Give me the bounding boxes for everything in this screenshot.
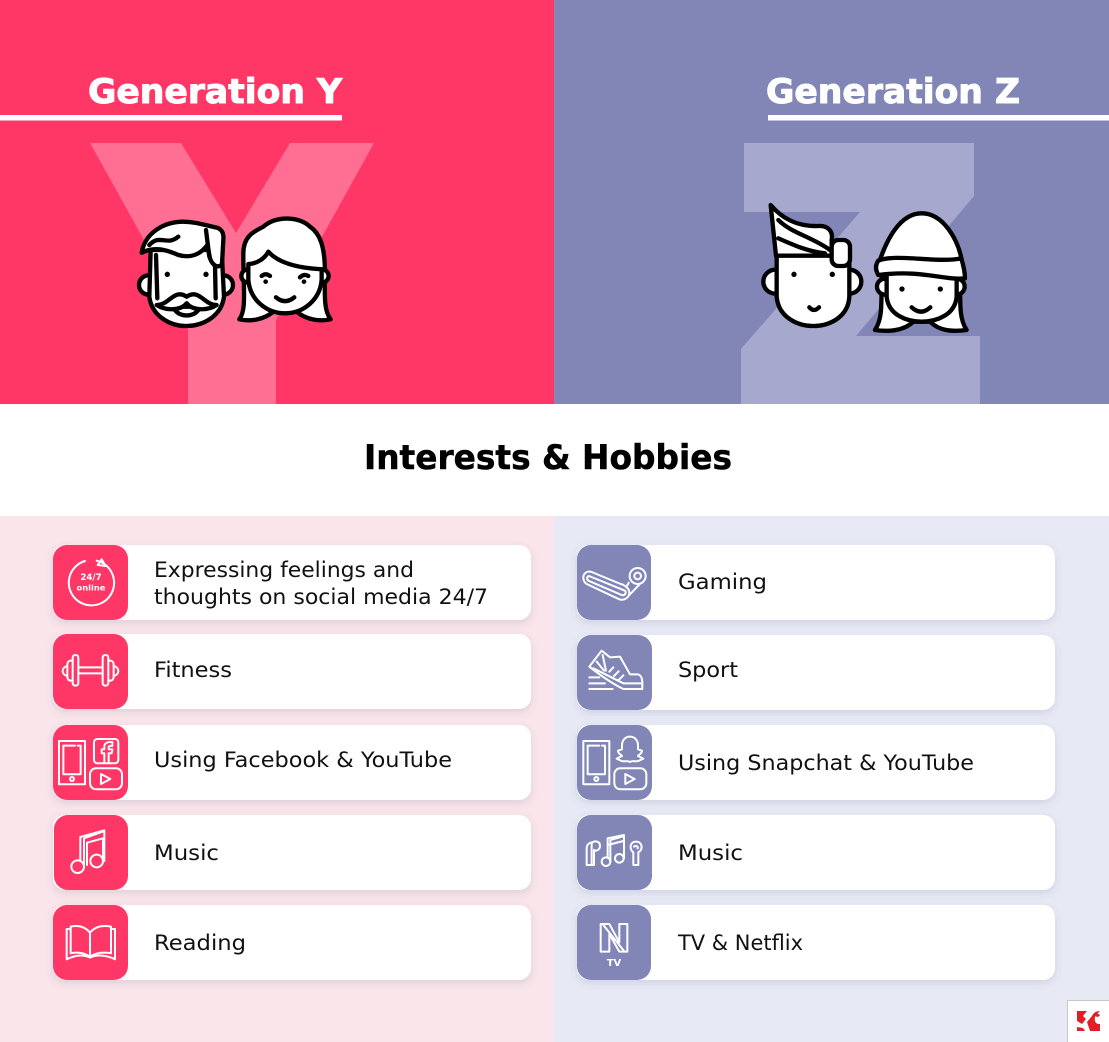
card: social media 24/7: thoughts on social media 24/7 <box>154 585 488 610</box>
panel: Generation Y header <box>0 0 554 404</box>
icon: Generation Z woman with beanie <box>875 213 967 331</box>
card: music <box>53 815 531 890</box>
card: Snapchat and YouTube: Using Snapchat & YouTube <box>678 751 974 776</box>
card: Snapchat and YouTube <box>577 725 1055 800</box>
card: reading <box>53 905 531 980</box>
card: gaming <box>577 545 1055 620</box>
icon: 24/7 online <box>69 559 114 605</box>
icon: 24/7 online: 24/7 <box>80 573 102 583</box>
icon: open book <box>67 926 115 959</box>
icon: Netflix TV <box>601 924 627 969</box>
card: fitness <box>53 634 531 709</box>
icon: phone, Facebook and YouTube <box>59 739 122 789</box>
logo badge <box>1068 1000 1109 1042</box>
card: social media 24/7 <box>53 545 531 620</box>
card: Facebook and YouTube <box>53 725 531 800</box>
card: gaming: Gaming <box>678 570 767 595</box>
heading: Generation Z: Generation Z <box>766 72 1020 112</box>
heading: Generation Y <box>0 72 342 120</box>
card: TV and Netflix <box>577 905 1055 980</box>
icon: dumbbell <box>63 655 118 686</box>
icon: Generation Y man with moustache <box>139 222 233 326</box>
card: fitness: Fitness <box>154 658 232 683</box>
icon: phone, Snapchat and YouTube <box>583 737 646 789</box>
icon: Generation Y woman <box>239 219 331 320</box>
panel: Generation Y interests <box>0 516 554 1042</box>
heading: Generation Z <box>766 72 1109 120</box>
card: music <box>577 815 1055 890</box>
big letter Z <box>741 143 980 404</box>
panel: Generation Z interests <box>554 516 1109 1042</box>
icon: music notes <box>71 830 104 873</box>
icon: running shoe <box>589 651 642 689</box>
card: social media 24/7: Expressing feelings and <box>154 558 414 583</box>
card: sport: Sport <box>678 658 738 683</box>
card: Facebook and YouTube: Using Facebook & YouTube <box>154 748 452 773</box>
card: reading: Reading <box>154 931 246 956</box>
card: TV and Netflix: TV & Netflix <box>677 931 803 956</box>
card: music: Music <box>678 841 743 866</box>
panel: Generation Z header <box>554 0 1109 404</box>
heading: Generation Y: Generation Y <box>88 72 342 112</box>
icon: Steam logo <box>583 568 646 600</box>
icon: music notes and earbuds <box>587 835 642 866</box>
card: sport <box>577 635 1055 710</box>
icon: 24/7 online: online <box>77 583 106 593</box>
big letter Y <box>90 143 374 404</box>
icon: Generation Z man with quiff <box>763 205 861 326</box>
card: music: Music <box>154 841 219 866</box>
icon: Netflix TV: TV <box>607 958 622 969</box>
heading: Interests & Hobbies: Interests & Hobbies <box>364 438 732 478</box>
